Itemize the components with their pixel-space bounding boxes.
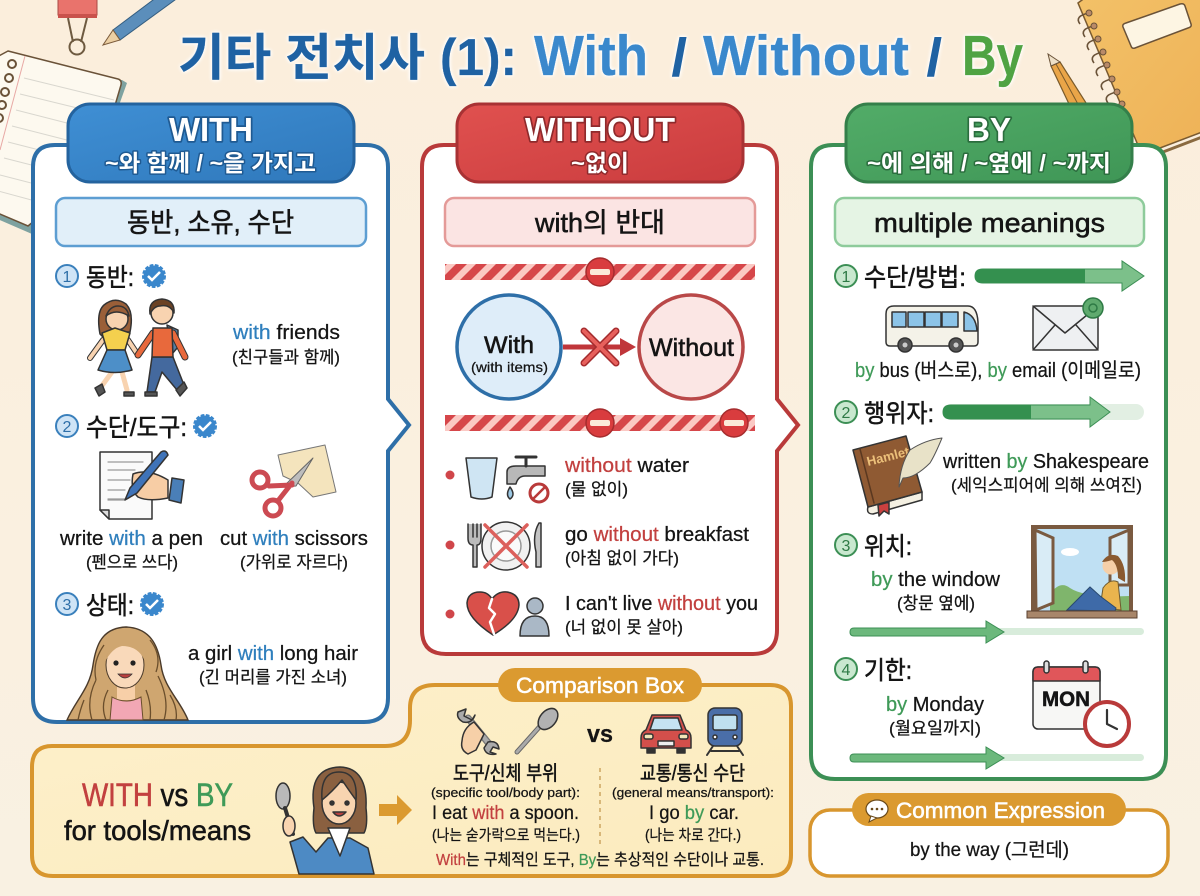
title: (1): (440, 29, 517, 87)
decoration: binder clip (58, 0, 97, 54)
text: by Monday (886, 694, 984, 738)
item 1 heading: accompaniment: 동반: (86, 264, 134, 292)
text: a girl with long hair (188, 643, 358, 687)
icon: scissors cutting paper (252, 445, 336, 516)
title (178, 24, 1023, 88)
title: By (962, 24, 1023, 88)
text: written by Shakespeare: (세익스피어에 의해 쓰여진) (951, 476, 1142, 495)
text: with friends (232, 322, 340, 367)
item 2 heading with progress arrow: 행위자: (864, 400, 934, 428)
panel: by (811, 104, 1166, 779)
item 2 heading: means: 수단/도구: (86, 414, 187, 442)
header: with (68, 104, 354, 182)
text: written by Shakespeare: written by Shakespeare (942, 451, 1149, 473)
text: by Monday: (월요일까지) (889, 719, 981, 738)
header: without (457, 104, 743, 182)
text: transport column: (나는 차로 간다.) (645, 827, 741, 844)
text: by the window: (창문 옆에) (897, 594, 975, 613)
subheading: without: with의 반대 (534, 208, 665, 238)
text: with vs by: WITH vs BY (82, 777, 233, 813)
icon: teacher with spoon (276, 767, 374, 874)
text: tools column: I eat with a spoon. (432, 803, 579, 824)
item 3 heading: 3 (842, 538, 851, 555)
text: transport column: I go by car. (649, 803, 739, 824)
row: I can't live without you: I can't live without you (565, 593, 758, 615)
header: without: ~없이 (571, 150, 629, 176)
subheading: without (445, 198, 755, 246)
text: by the window (871, 569, 1001, 613)
item 1 heading: accompaniment (56, 264, 164, 292)
text: cut with scissors: cut with scissors (220, 528, 368, 550)
text: transport column (600, 762, 774, 845)
text: write with a pen (59, 528, 203, 572)
text: with friends: (친구들과 함께) (232, 348, 340, 367)
item 3 heading: state: 3 (63, 597, 72, 614)
title: Without (703, 24, 909, 88)
row: without water: (물 없이) (565, 480, 628, 499)
row: go without breakfast (446, 522, 749, 570)
text: transport column: (general means/transport): (612, 785, 774, 800)
text: tools column: (나는 숟가락으로 먹는다.) (432, 827, 580, 844)
comparison pill (498, 668, 702, 702)
item 3 heading (835, 533, 912, 561)
item 1 heading: accompaniment: 1 (63, 269, 72, 286)
item 4 heading (835, 657, 912, 685)
text: by the way: by the way (그런데) (910, 839, 1069, 861)
icon: girl by the window (1027, 525, 1137, 618)
row: I can't live without you (446, 592, 758, 637)
title: / (672, 29, 686, 87)
item 2 heading with progress arrow: 2 (842, 405, 851, 422)
subheading: by: multiple meanings (874, 208, 1105, 238)
header: without: WITHOUT (525, 111, 675, 148)
diagram: with to without: Without (649, 334, 734, 362)
icon: wrench and spoon (458, 705, 562, 754)
text: cut with scissors (220, 528, 368, 572)
subheading: with: 동반, 소유, 수단 (127, 208, 294, 238)
text: vs: vs (587, 721, 613, 748)
panel: comparison (32, 668, 791, 876)
decoration: pencil (103, 0, 179, 45)
icon: calendar and clock: MON (1042, 688, 1090, 711)
item 2 heading: means: 2 (63, 419, 72, 436)
text: tools column (431, 762, 580, 844)
icon: hand writing with pen (100, 451, 184, 519)
icon: email envelope (1033, 298, 1103, 350)
item 3 heading: state: 상태: (86, 592, 134, 620)
decoration: pencil right (1048, 54, 1088, 106)
item 4 heading: 4 (842, 662, 851, 679)
progress arrow 4 (850, 747, 1144, 769)
text: a girl with long hair: (긴 머리를 가진 소녀) (199, 668, 347, 687)
common expression pill (852, 793, 1126, 826)
text: with friends: with friends (232, 322, 340, 344)
comparison pill: Comparison Box (516, 673, 684, 698)
header: with: ~와 함께 / ~을 가지고 (105, 150, 316, 176)
text: cut with scissors: (가위로 자르다) (240, 553, 348, 572)
text: write with a pen: (펜으로 쓰다) (86, 553, 178, 572)
striped divider bottom (445, 409, 755, 437)
icon: car and train (641, 708, 743, 755)
subheading: by (835, 198, 1144, 246)
subheading: with (56, 198, 366, 246)
item 3 heading: 위치: (864, 533, 912, 561)
icon: calendar and clock (1033, 661, 1129, 746)
item 2 heading: means (56, 414, 216, 442)
title: With (534, 24, 648, 88)
header: with: WITH (169, 111, 253, 148)
text: by bus, by email: by bus (버스로), by email (이메일로) (855, 359, 1141, 382)
title: 기타 전치사 (178, 30, 425, 86)
text: write with a pen: write with a pen (59, 528, 203, 550)
text: written by Shakespeare (942, 451, 1149, 495)
text: tools column: (specific tool/body part): (431, 785, 580, 800)
item 4 heading: 기한: (864, 657, 912, 685)
icon: Hamlet book and quill: Hamlet (865, 444, 911, 469)
icon: girl with long hair (67, 627, 188, 720)
row: without water: without water (564, 455, 689, 477)
common expression pill: Common Expression (896, 798, 1105, 823)
text: by the window: by the window (871, 569, 1001, 591)
text: with vs by: for tools/means (64, 815, 251, 846)
row: go without breakfast: (아침 없이 가다) (565, 549, 679, 568)
panel: without (422, 104, 798, 654)
arrow: orange (379, 795, 412, 825)
item 1 heading with progress arrow: 수단/방법: (864, 264, 966, 292)
row: without water (446, 455, 689, 502)
row: go without breakfast: go without breakfast (565, 524, 749, 546)
panel: with (33, 104, 409, 722)
item 1 heading with progress arrow (835, 261, 1144, 292)
diagram: with to without: (with items) (471, 359, 548, 375)
text: a girl with long hair: a girl with long hair (188, 643, 358, 665)
header: by: BY (967, 111, 1011, 148)
row: I can't live without you: (너 없이 못 살아) (565, 618, 683, 637)
text: tools column: 도구/신체 부위 (453, 762, 558, 785)
text: by Monday: by Monday (886, 694, 984, 716)
panel: common expression (810, 793, 1168, 876)
text: transport column: 교통/통신 수단 (640, 762, 745, 785)
icon: bus (886, 306, 978, 352)
text: comparison summary: With는 구체적인 도구, By는 추상적인 수단이나 교통. (436, 851, 764, 869)
icon: Hamlet book and quill (853, 436, 942, 516)
diagram: with to without (457, 295, 743, 399)
striped divider top (445, 258, 755, 286)
decoration: notebook left (0, 51, 127, 234)
text: with vs by (64, 777, 251, 846)
item 2 heading with progress arrow (835, 397, 1144, 428)
header: by: ~에 의해 / ~옆에 / ~까지 (867, 150, 1111, 176)
icon: two children (90, 299, 187, 396)
title: / (927, 29, 941, 87)
progress arrow 3 (850, 621, 1144, 643)
header: by (846, 104, 1132, 182)
item 1 heading with progress arrow: 1 (842, 269, 851, 286)
diagram: with to without: With (484, 332, 534, 359)
decoration: notebook right (1078, 0, 1200, 152)
item 3 heading: state (56, 592, 162, 620)
